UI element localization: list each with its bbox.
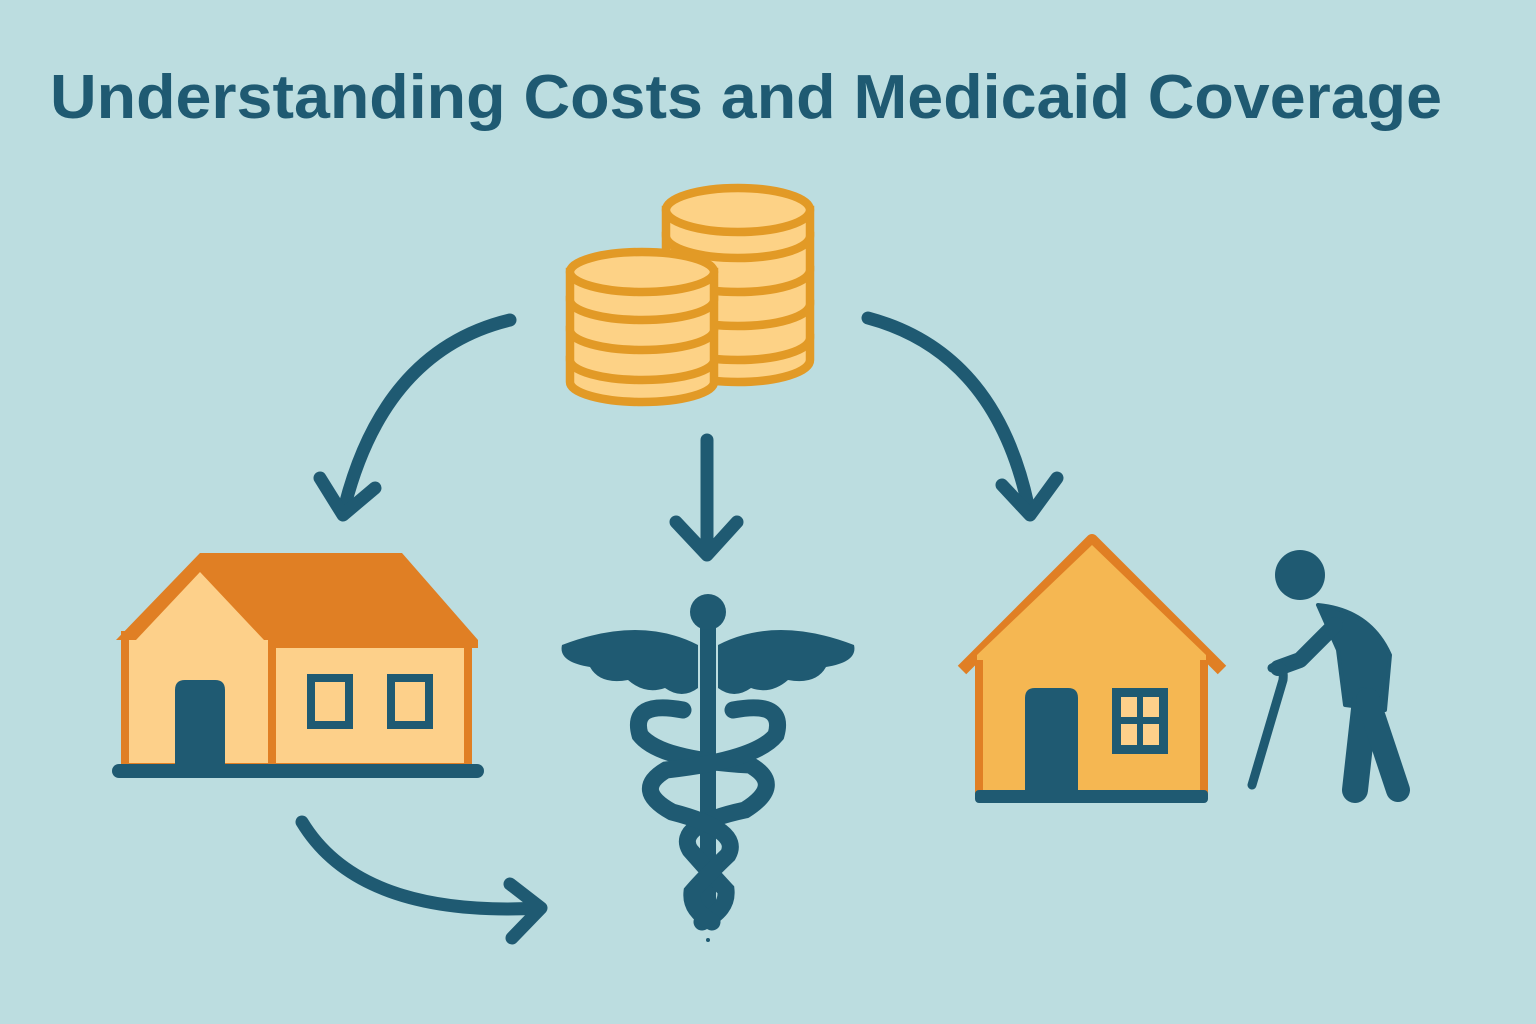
icon: senior home: [962, 540, 1222, 803]
arrow: coins to caduceus: [676, 440, 737, 555]
arrow: coins to house: [320, 320, 510, 515]
icon: coin stacks: [570, 188, 810, 402]
title: Understanding Costs and Medicaid Coverage: [50, 63, 1442, 132]
icon: family house: [112, 553, 484, 778]
arrow: house to caduceus: [302, 822, 541, 938]
icon: elderly person with cane: [1252, 550, 1398, 790]
arrow: coins to senior home: [868, 318, 1057, 515]
icon: caduceus: [562, 594, 854, 942]
